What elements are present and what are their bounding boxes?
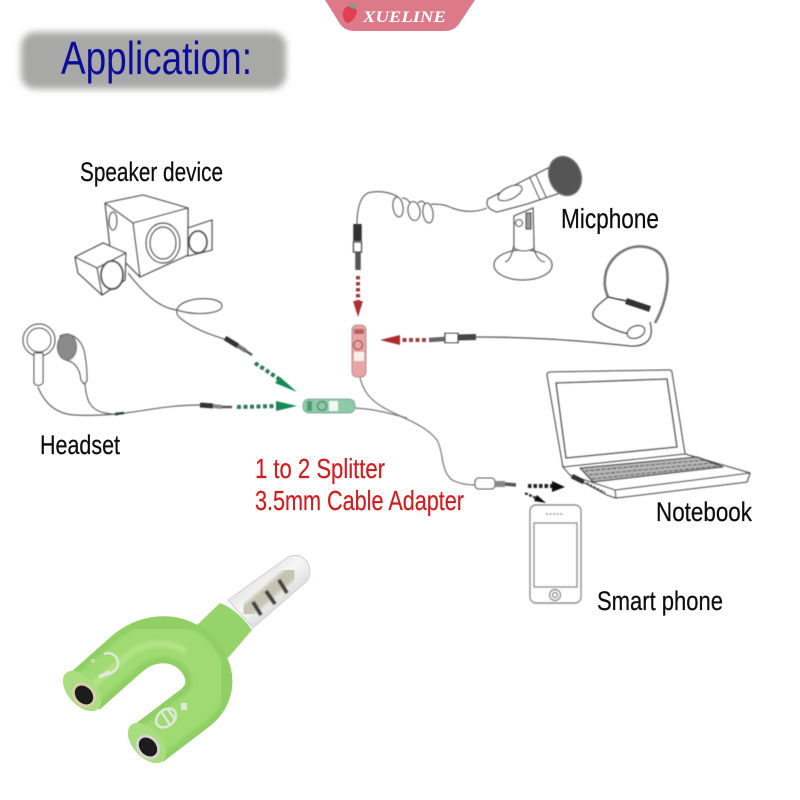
icon: headphone symbol: [91, 653, 118, 677]
speaker cable and plug: [128, 273, 252, 355]
arrow: plug to notebook: [528, 481, 565, 492]
heading: Application: Application:: [61, 32, 252, 84]
icon: green splitter: [303, 399, 355, 413]
icon: strawberry: [343, 3, 358, 23]
product photo: green U splitter: [56, 555, 310, 770]
label: Micphone: Micphone: [561, 203, 659, 234]
arrow: headset to splitter: [237, 401, 297, 411]
red label: splitter description: 1 to 2 Splitter: [255, 453, 385, 484]
red label: splitter description: [255, 453, 464, 516]
icon: pink splitter: [352, 325, 366, 377]
icon: earphones: [23, 324, 87, 386]
green body: [84, 603, 252, 743]
headset microphone plug: [429, 333, 476, 343]
icon: speaker set: [75, 195, 212, 295]
transparent plug tip: [228, 555, 310, 628]
label: Smart phone: Smart phone: [597, 586, 723, 616]
logo badge: XUELINE: [325, 0, 475, 31]
arrow: speaker to splitter: [255, 363, 297, 392]
red label: splitter description: 3.5mm Cable Adapter: [255, 485, 464, 516]
right jack: [121, 716, 173, 770]
icon: microphone: [487, 152, 587, 280]
arrow: headset microphone to splitter: [380, 335, 428, 345]
arrow: microphone to splitter: [353, 276, 363, 317]
icon: headset microphone: [476, 246, 668, 346]
splitter cables: [355, 377, 475, 485]
output plug: [475, 478, 516, 489]
microphone cable and plug: [354, 192, 487, 270]
label: Speaker device: Speaker device: [80, 157, 223, 187]
icon: smart phone: [530, 505, 581, 603]
label: Notebook: Notebook: [656, 497, 752, 527]
label: Headset: Headset: [40, 430, 120, 460]
icon: microphone symbol: [152, 703, 187, 731]
icon: notebook: [547, 370, 750, 498]
headset cable and plug: [38, 383, 232, 415]
arrow: plug to smart phone: [525, 493, 546, 503]
logo text: XUELINE: [362, 9, 446, 26]
left jack: [56, 664, 108, 718]
